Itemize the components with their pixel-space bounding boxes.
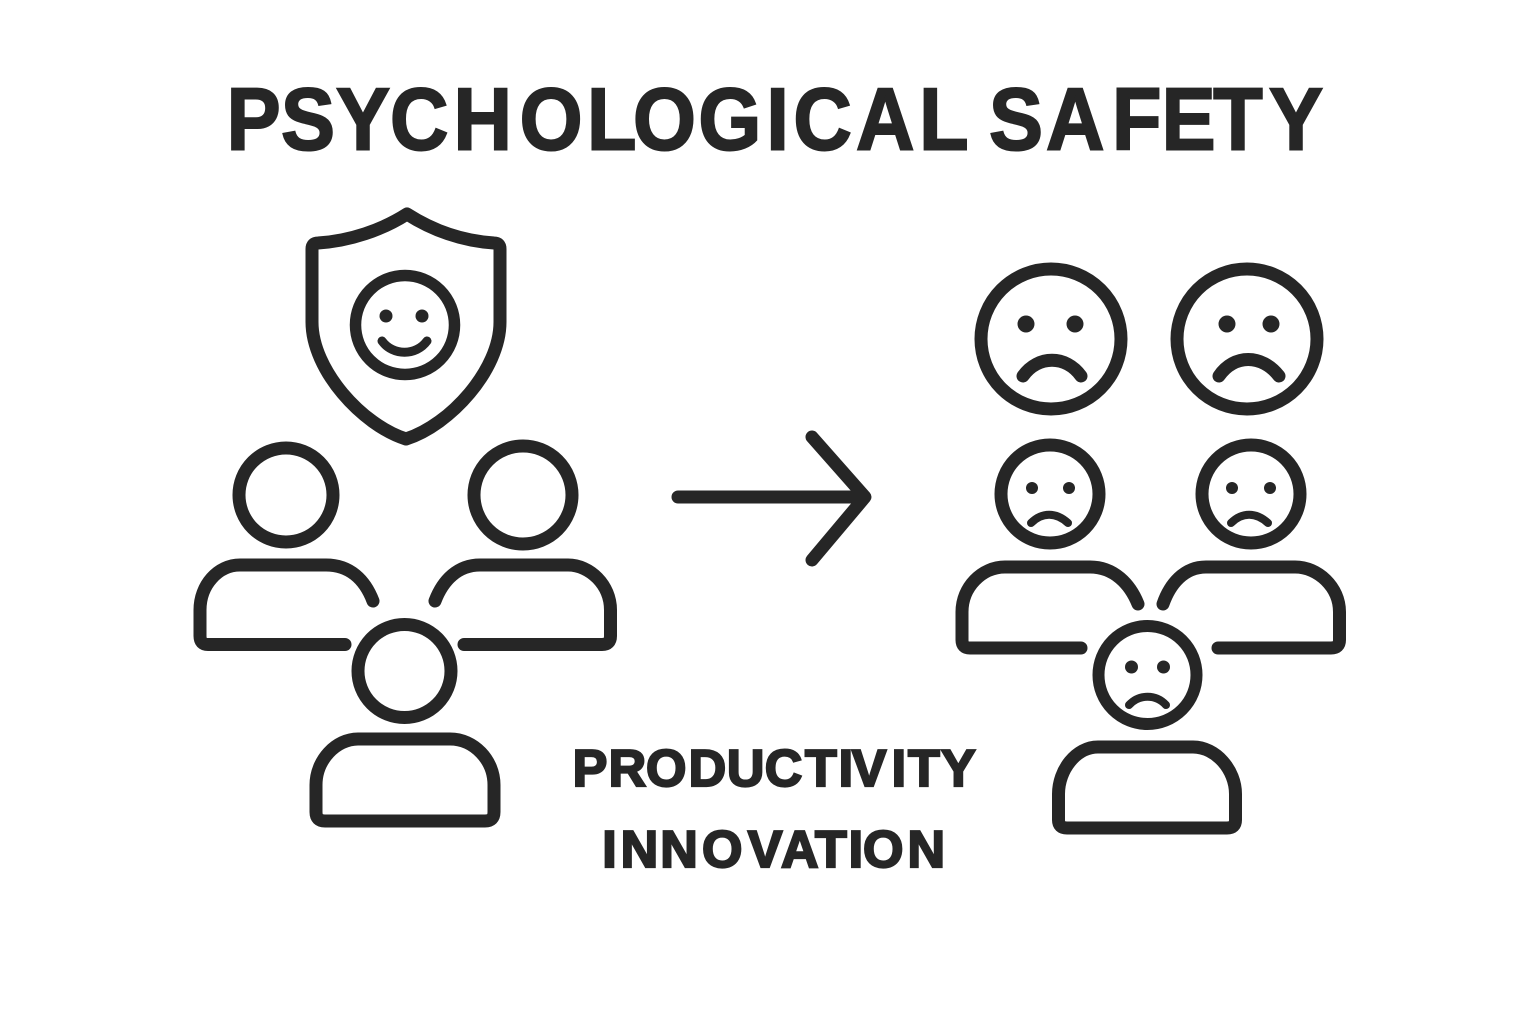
label: innovation: INNOVATION xyxy=(602,821,945,879)
person: top left xyxy=(200,448,373,644)
icon: right team of three sad people xyxy=(962,445,1340,828)
arrow xyxy=(678,437,865,560)
person: bottom centre xyxy=(316,624,494,821)
person: top right xyxy=(435,446,610,644)
label: productivity: PRODUCTIVITY xyxy=(573,740,976,798)
icon: sad face right xyxy=(1177,269,1317,409)
person: top left, sad xyxy=(962,445,1138,648)
icon: left team of three people xyxy=(200,446,610,821)
title: PSYCHOLOGICAL SAFETY xyxy=(227,69,1323,168)
person: bottom centre, sad xyxy=(1058,626,1236,828)
icon: sad face left xyxy=(981,269,1121,409)
icon: shield with smiling face xyxy=(312,214,500,439)
person: top right, sad xyxy=(1163,445,1340,648)
